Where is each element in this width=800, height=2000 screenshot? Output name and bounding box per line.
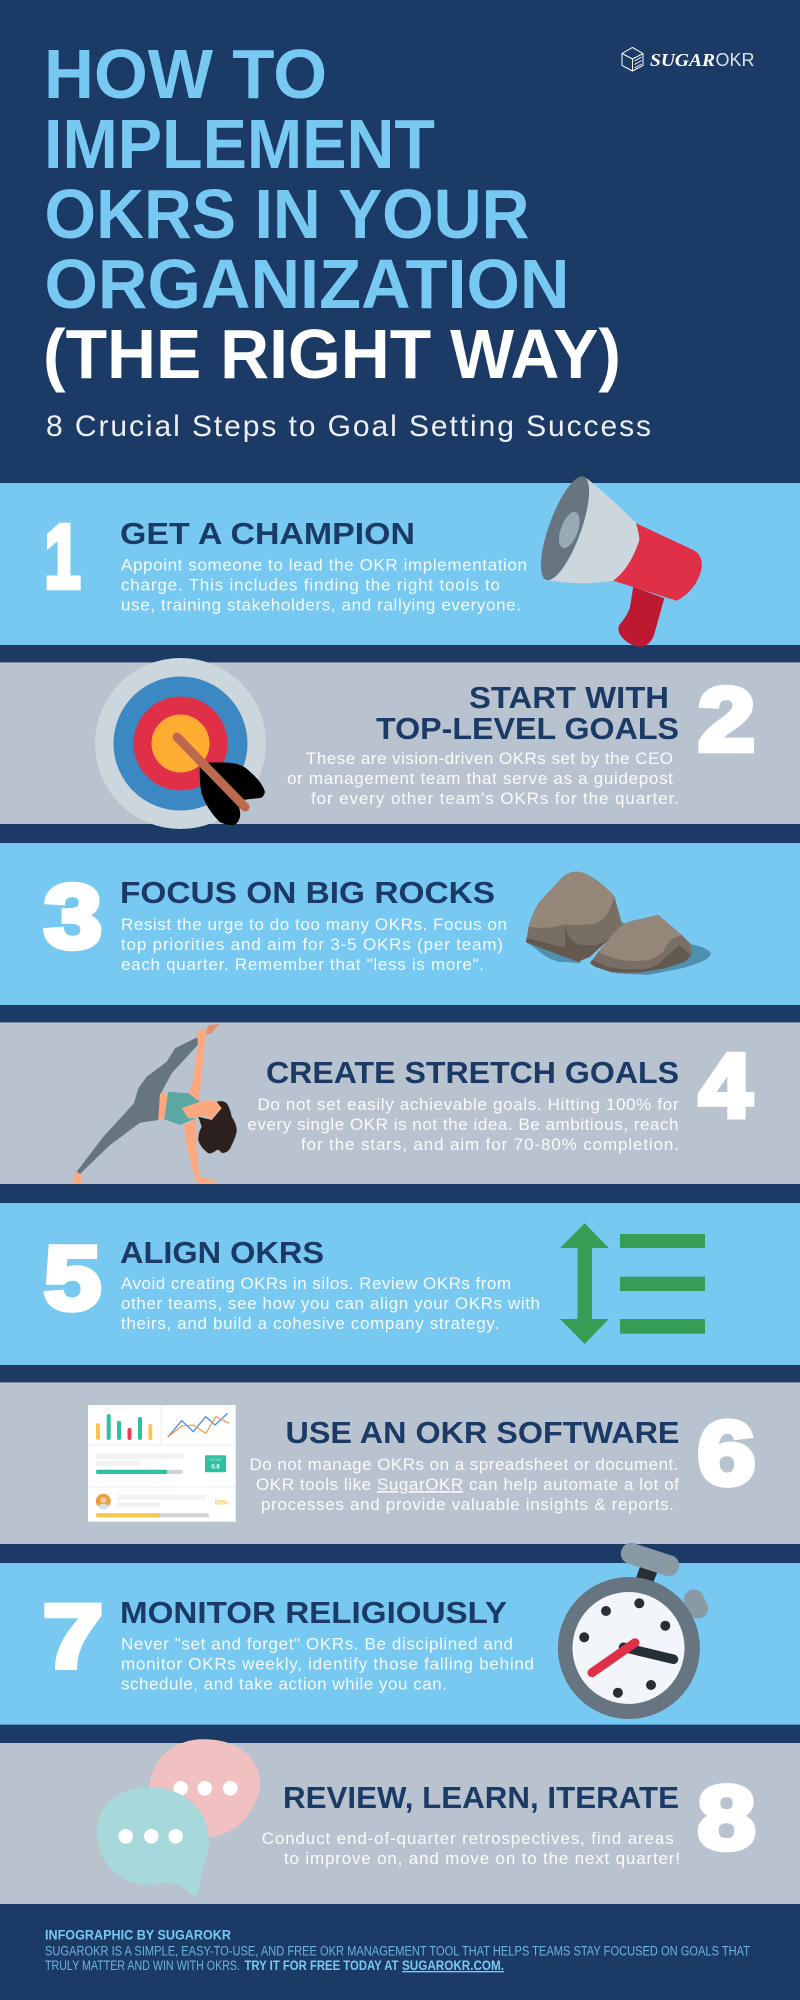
text: step 1 description [121, 556, 527, 614]
panel: step 1 get a champion [0, 471, 800, 647]
text: step 4 description [248, 1095, 679, 1154]
logo: SugarOKR: OKR [716, 50, 754, 70]
footer text: TRULY MATTER AND WIN WITH OKRS. [45, 1958, 240, 1973]
step number 5: 5 [44, 1229, 101, 1329]
text: step 5 description: Avoid creating OKRs in silos. Review OKRs from [121, 1274, 511, 1293]
title: (THE RIGHT WAY) [43, 315, 621, 393]
step number 3: 3 [44, 868, 102, 968]
text: step 7 description [121, 1634, 534, 1693]
score box: 0.8 [211, 1464, 220, 1470]
title [43, 35, 621, 393]
score box: SCORE [209, 1458, 222, 1462]
heading: start with top-level goals [376, 680, 679, 746]
text: step 3 description: top priorities and aim for 3-5 OKRs (per team) [121, 935, 503, 954]
text: step 2 description: or management team that serve as a guidepost [287, 769, 673, 788]
step number 4: 4 [699, 1036, 752, 1136]
text: step 6 description [250, 1455, 679, 1514]
heading: start with top-level goals: START WITH [469, 680, 669, 715]
panel: step 6 use an okr software [0, 1382, 800, 1544]
text: step 7 description: Never "set and forget" OKRs. Be disciplined and [121, 1634, 513, 1653]
heading: create stretch goals: CREATE STRETCH GOALS [266, 1055, 679, 1090]
heading: start with top-level goals: TOP-LEVEL GOALS [376, 711, 679, 746]
text: step 3 description [121, 915, 507, 974]
text: step 8 description [262, 1829, 680, 1868]
pink speech bubble [149, 1739, 260, 1837]
panel: step 8 review, learn, iterate [0, 1739, 800, 1904]
text: step 3 description: Resist the urge to do too many OKRs. Focus on [121, 915, 507, 934]
title: OKRS IN YOUR [44, 175, 530, 253]
text: step 8 description: Conduct end-of-quarter retrospectives, find areas [262, 1829, 674, 1848]
text: step 6 description: Do not manage OKRs on a spreadsheet or document. [250, 1455, 678, 1474]
step number 7: 7 [43, 1588, 103, 1688]
footer [45, 1928, 750, 1973]
bar chart: mini bars [96, 1414, 152, 1440]
footer text: SUGAROKR.COM. [402, 1958, 504, 1973]
icon: rocks [526, 872, 711, 975]
icon: target with arrow [95, 658, 266, 829]
chart: software dashboard: 53% [215, 1500, 228, 1506]
text: step 1 description: use, training stakeholders, and rallying everyone. [121, 596, 521, 614]
line chart: mini lines [168, 1413, 229, 1437]
panel: step 5 align okrs [0, 1203, 800, 1365]
panel: step 3 focus on big rocks [0, 843, 800, 1005]
text: step 5 description: other teams, see how you can align your OKRs with [121, 1294, 540, 1313]
icon: yoga figure [73, 1024, 237, 1183]
logo: SugarOKR [622, 48, 754, 71]
heading: focus on big rocks: FOCUS ON BIG ROCKS [120, 875, 495, 910]
icon: align arrow and bars [560, 1223, 705, 1344]
title: ORGANIZATION [44, 245, 570, 323]
chart: software dashboard [88, 1405, 236, 1522]
icon: stopwatch [558, 1540, 711, 1719]
text: step 4 description: Do not set easily achievable goals. Hitting 100% for [258, 1095, 679, 1114]
heading: get a champion: GET A CHAMPION [120, 516, 415, 551]
text: step 6 description: OKR tools like SugarOKR can help automate a lot of [256, 1475, 679, 1494]
panel: step 4 create stretch goals [0, 1022, 800, 1184]
text: step 1 description: Appoint someone to lead the OKR implementation [121, 556, 527, 574]
text: step 8 description: to improve on, and move on to the next quarter! [284, 1849, 680, 1868]
icon: speech bubbles [97, 1739, 260, 1896]
heading: review, learn, iterate: REVIEW, LEARN, ITERATE [283, 1780, 679, 1815]
heading: use an okr software: USE AN OKR SOFTWARE [286, 1415, 680, 1450]
heading: align okrs: ALIGN OKRS [120, 1235, 324, 1270]
text: step 4 description: for the stars, and aim for 70-80% completion. [301, 1135, 679, 1154]
logo: SugarOKR: SUGAR [650, 50, 715, 70]
text: step 4 description: every single OKR is not the idea. Be ambitious, reach [248, 1115, 678, 1134]
step number 8: 8 [698, 1768, 756, 1868]
text: step 6 description: processes and provide valuable insights & reports. [261, 1495, 674, 1514]
heading: monitor religiously: MONITOR RELIGIOUSLY [120, 1595, 507, 1630]
panel: step 2 start with top-level goals [0, 658, 800, 829]
subtitle: 8 Crucial Steps to Goal Setting Success [46, 410, 651, 443]
text: step 2 description: These are vision-driven OKRs set by the CEO [306, 749, 673, 768]
step number 2: 2 [698, 670, 755, 770]
text: step 3 description: each quarter. Remember that "less is more". [121, 955, 484, 974]
score box [205, 1455, 226, 1472]
text: step 5 description: theirs, and build a cohesive company strategy. [121, 1314, 499, 1333]
text: step 2 description: for every other team's OKRs for the quarter. [311, 789, 679, 808]
title: HOW TO [44, 35, 327, 113]
step number 6: 6 [698, 1404, 756, 1504]
text: step 1 description: charge. This includes finding the right tools to [121, 576, 500, 594]
text: step 2 description [287, 749, 679, 808]
footer text [45, 1943, 750, 1973]
panel: step 7 monitor religiously [0, 1540, 800, 1725]
step number 1: 1 [44, 508, 80, 608]
title: IMPLEMENT [44, 105, 435, 183]
teal speech bubble [97, 1787, 209, 1896]
text: step 5 description [121, 1274, 540, 1333]
footer text: TRY IT FOR FREE TODAY AT [244, 1958, 399, 1973]
text: step 7 description: schedule, and take action while you can. [121, 1674, 447, 1693]
icon: megaphone [531, 471, 702, 647]
text: step 7 description: monitor OKRs weekly, identify those falling behind [121, 1654, 534, 1673]
footer heading: INFOGRAPHIC BY SUGAROKR [45, 1928, 231, 1942]
